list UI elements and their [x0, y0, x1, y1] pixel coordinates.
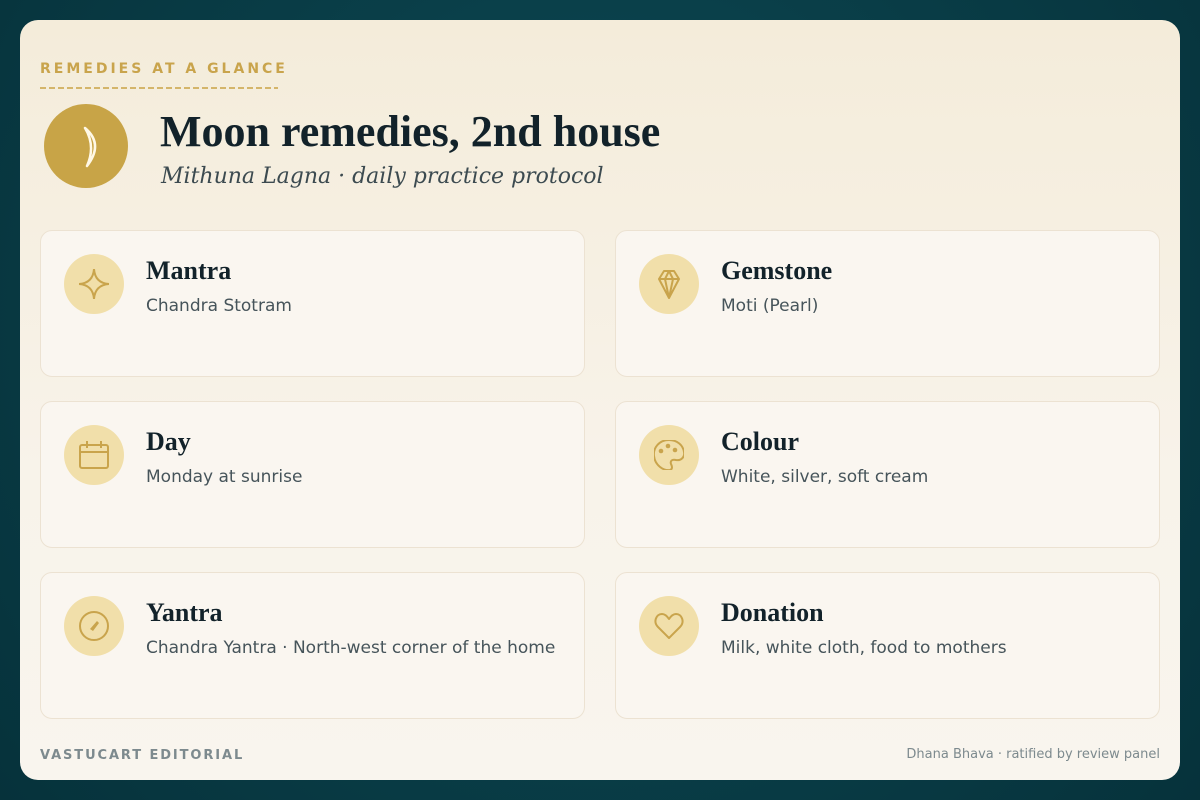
title: Moon remedies, 2nd house [160, 107, 660, 156]
card: gemstone: Moti (Pearl) [721, 296, 818, 316]
card: donation [615, 572, 1160, 719]
icon: compass [64, 596, 124, 656]
card: colour: White, silver, soft cream [721, 467, 928, 487]
card: gemstone: Gemstone [721, 256, 832, 285]
card: yantra [40, 572, 585, 719]
icon: calendar [64, 425, 124, 485]
icon: palette [639, 425, 699, 485]
card: day [40, 401, 585, 548]
card: donation: Donation [721, 598, 824, 627]
card: mantra: Chandra Stotram [146, 296, 292, 316]
kicker: REMEDIES AT A GLANCE [40, 61, 288, 77]
card: mantra: Mantra [146, 256, 231, 285]
subtitle: Mithuna Lagna · daily practice protocol [161, 164, 604, 189]
footer right: Dhana Bhava · ratified by review panel [906, 747, 1160, 762]
icon: moon [44, 104, 128, 188]
icon: sparkle [64, 254, 124, 314]
card: yantra: Chandra Yantra · North-west corner of the home [146, 638, 555, 658]
card: yantra: Yantra [146, 598, 223, 627]
card: day: Day [146, 427, 191, 456]
card: colour: Colour [721, 427, 799, 456]
card: day: Monday at sunrise [146, 467, 302, 487]
icon: heart [639, 596, 699, 656]
card: donation: Milk, white cloth, food to mothers [721, 638, 1007, 658]
icon: gem [639, 254, 699, 314]
card: gemstone [615, 230, 1160, 377]
footer left: VASTUCART EDITORIAL [40, 748, 244, 763]
card: mantra [40, 230, 585, 377]
card: colour [615, 401, 1160, 548]
